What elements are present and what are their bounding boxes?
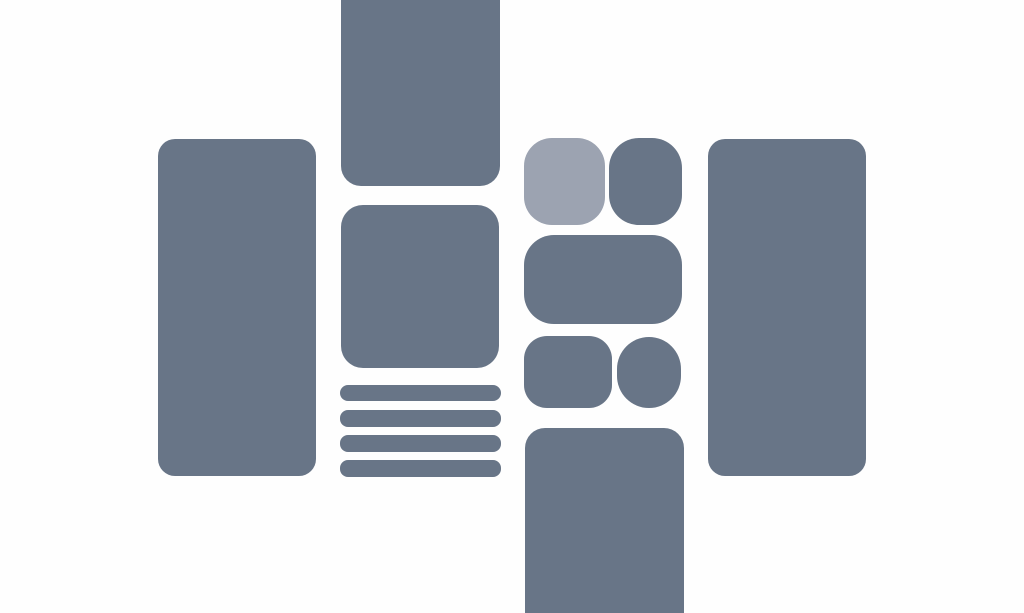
tile: lower left rounded (524, 336, 612, 408)
bar 3 (340, 435, 500, 452)
bar 1 (340, 384, 500, 401)
tile: wide pill (524, 235, 682, 324)
panel: top center block (340, 0, 500, 186)
panel: left column (158, 139, 316, 476)
bar 4 (340, 460, 500, 476)
panel: right column (708, 139, 866, 476)
tile: highlighted light square (524, 138, 605, 225)
tile: lower right circle (617, 337, 681, 408)
bar 2 (340, 410, 500, 426)
tile: small rounded square (609, 138, 682, 225)
panel: bottom center block (525, 428, 684, 613)
panel: center square (340, 205, 499, 368)
